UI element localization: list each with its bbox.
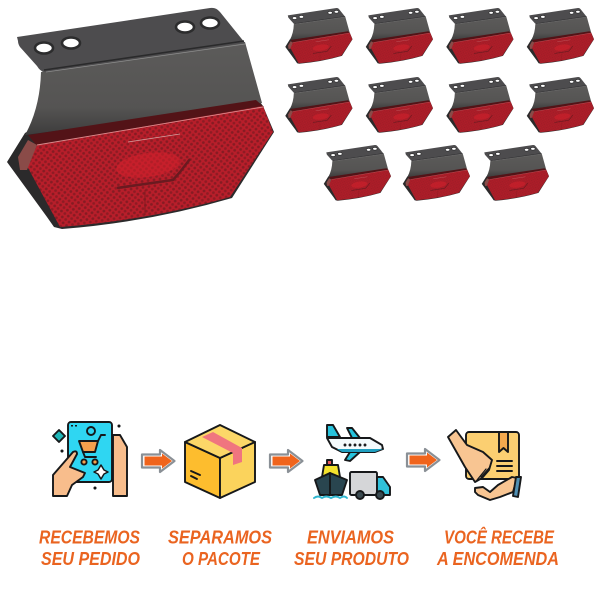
caption: step 4: [436, 526, 559, 569]
icon: order on tablet: [53, 422, 127, 496]
caption: step 2: SEPARAMOS: [168, 528, 272, 548]
caption: step 3: ENVIAMOS: [307, 528, 394, 548]
caption: step 1: [39, 528, 140, 569]
icon: hands receiving parcel: [448, 430, 521, 500]
arrow: step 2 to 3: [270, 450, 302, 472]
arrow: step 3 to 4: [407, 449, 440, 471]
caption: step 4: VOCÊ RECEBE: [444, 526, 555, 548]
caption: step 3: [294, 528, 409, 569]
main product photo: red marker lamp: [7, 8, 274, 229]
caption: step 1: RECEBEMOS: [39, 528, 140, 548]
caption: step 2: [168, 528, 272, 569]
icon: plane, ship and truck: [314, 425, 390, 499]
caption: step 2: O PACOTE: [182, 549, 261, 569]
caption: step 1: SEU PEDIDO: [41, 549, 140, 569]
caption: step 3: SEU PRODUTO: [294, 549, 409, 569]
arrow: step 1 to 2: [142, 450, 174, 472]
icon: cardboard box: [185, 425, 255, 498]
caption: step 4: A ENCOMENDA: [436, 549, 559, 569]
product multiples: grid of eleven small lamps: [285, 8, 594, 201]
